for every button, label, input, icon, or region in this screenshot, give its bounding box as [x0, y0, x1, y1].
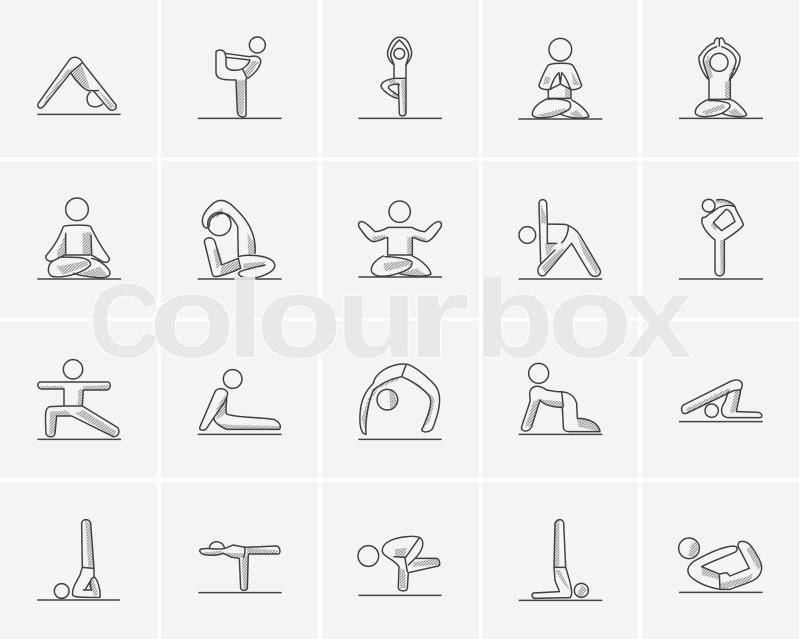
panel: seated arms overhead — [642, 0, 799, 158]
icon: shoulder stand left — [37, 520, 120, 600]
panel: dolphin pose — [642, 321, 799, 478]
head — [209, 542, 224, 548]
panel: crow pose — [322, 482, 479, 639]
panel: cat pose — [482, 321, 638, 478]
icon: standing king dancer — [679, 199, 763, 279]
icon: lotus meditation — [37, 198, 121, 279]
watermark: x — [625, 252, 692, 382]
panel: shoulder stand left — [0, 482, 157, 639]
icon: namaste seated pose — [518, 38, 602, 119]
watermark: l — [226, 252, 264, 382]
panel: tree pose — [322, 0, 479, 158]
icon: seated arms overhead — [679, 38, 763, 118]
panel: bridge pose — [322, 321, 479, 478]
panel: downward dog — [0, 0, 157, 158]
panel: shoulder stand right — [482, 482, 638, 639]
watermark: u — [336, 252, 417, 382]
panel: warrior pose — [0, 321, 157, 478]
panel: lotus meditation — [0, 161, 157, 318]
icon: warrior pose — [37, 360, 121, 439]
icon: warrior three — [198, 542, 282, 593]
icon: boat pose — [679, 538, 763, 592]
panel: triangle pose — [482, 161, 638, 318]
panel: seated side bend — [161, 161, 318, 318]
icon: downward dog — [37, 57, 121, 114]
icon: triangle pose — [519, 200, 602, 279]
watermark: o — [256, 252, 342, 382]
icon: standing bow pose — [198, 37, 282, 118]
icon: crow pose — [358, 536, 442, 595]
panel: standing king dancer — [642, 161, 799, 318]
icon: cobra pose — [198, 370, 282, 434]
panel: cobra pose — [161, 321, 318, 478]
watermark: C — [89, 263, 160, 380]
watermark: o — [149, 252, 235, 382]
panel: standing bow pose — [161, 0, 318, 158]
icon: seated side bend — [198, 200, 282, 279]
icon: bridge pose — [358, 364, 442, 439]
watermark: b — [474, 252, 554, 382]
icon: tree pose — [358, 37, 442, 118]
watermark: o — [547, 252, 633, 382]
icon: cat pose — [519, 363, 602, 434]
icon: shoulder stand right — [519, 520, 602, 600]
panel: namaste seated pose — [482, 0, 638, 158]
panel: seated arms open — [322, 161, 479, 318]
icon: dolphin pose — [679, 380, 763, 422]
panel: boat pose — [642, 482, 799, 639]
panel: warrior three — [161, 482, 318, 639]
head — [87, 92, 103, 107]
watermark: r — [406, 252, 470, 382]
icon: seated arms open — [358, 201, 442, 277]
